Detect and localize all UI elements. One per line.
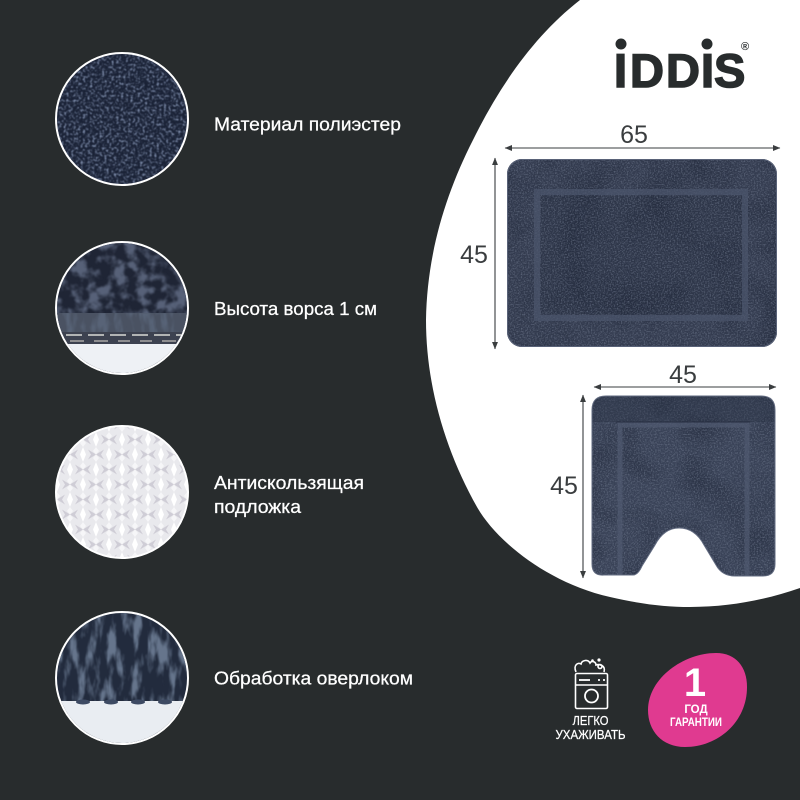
badge: 1 year warranty (648, 653, 747, 747)
dimension: rectangular rug width 65: 65 (620, 121, 648, 149)
badge: 1 year warranty: ГАРАНТИИ (670, 717, 722, 729)
label: anti-slip backing: Антискользящая (214, 473, 364, 493)
circle photo: overlock edge (56, 612, 188, 745)
caption: easy care: ЛЕГКО (572, 714, 609, 728)
badge: 1 year warranty: ГОД (684, 704, 708, 716)
dimension: contour rug height 45: 45 (550, 472, 578, 500)
label: material: Материал полиэстер (214, 114, 401, 134)
rectangular bath rug (507, 159, 777, 347)
logo: IDDIS: IDDIS (614, 44, 745, 97)
label: anti-slip backing (214, 473, 364, 517)
circle photo: anti-slip backing (56, 426, 188, 558)
circle photo: pile material (56, 53, 188, 185)
dimension: contour rug width 45: 45 (669, 361, 697, 389)
caption: easy care: УХАЖИВАТЬ (556, 728, 626, 742)
circle photo: pile height (56, 242, 188, 376)
label: overlock: Обработка оверлоком (214, 668, 413, 688)
icon: washing machine with foam (575, 658, 608, 708)
white product panel (426, 0, 800, 607)
caption: easy care (556, 714, 626, 742)
label: anti-slip backing: подложка (214, 497, 302, 517)
contour toilet rug (592, 396, 775, 576)
logo: IDDIS: ® (741, 41, 749, 53)
badge: 1 year warranty: 1 (684, 661, 706, 705)
dimension: rectangular rug height 45: 45 (460, 241, 488, 269)
label: pile height: Высота ворса 1 см (214, 299, 377, 319)
